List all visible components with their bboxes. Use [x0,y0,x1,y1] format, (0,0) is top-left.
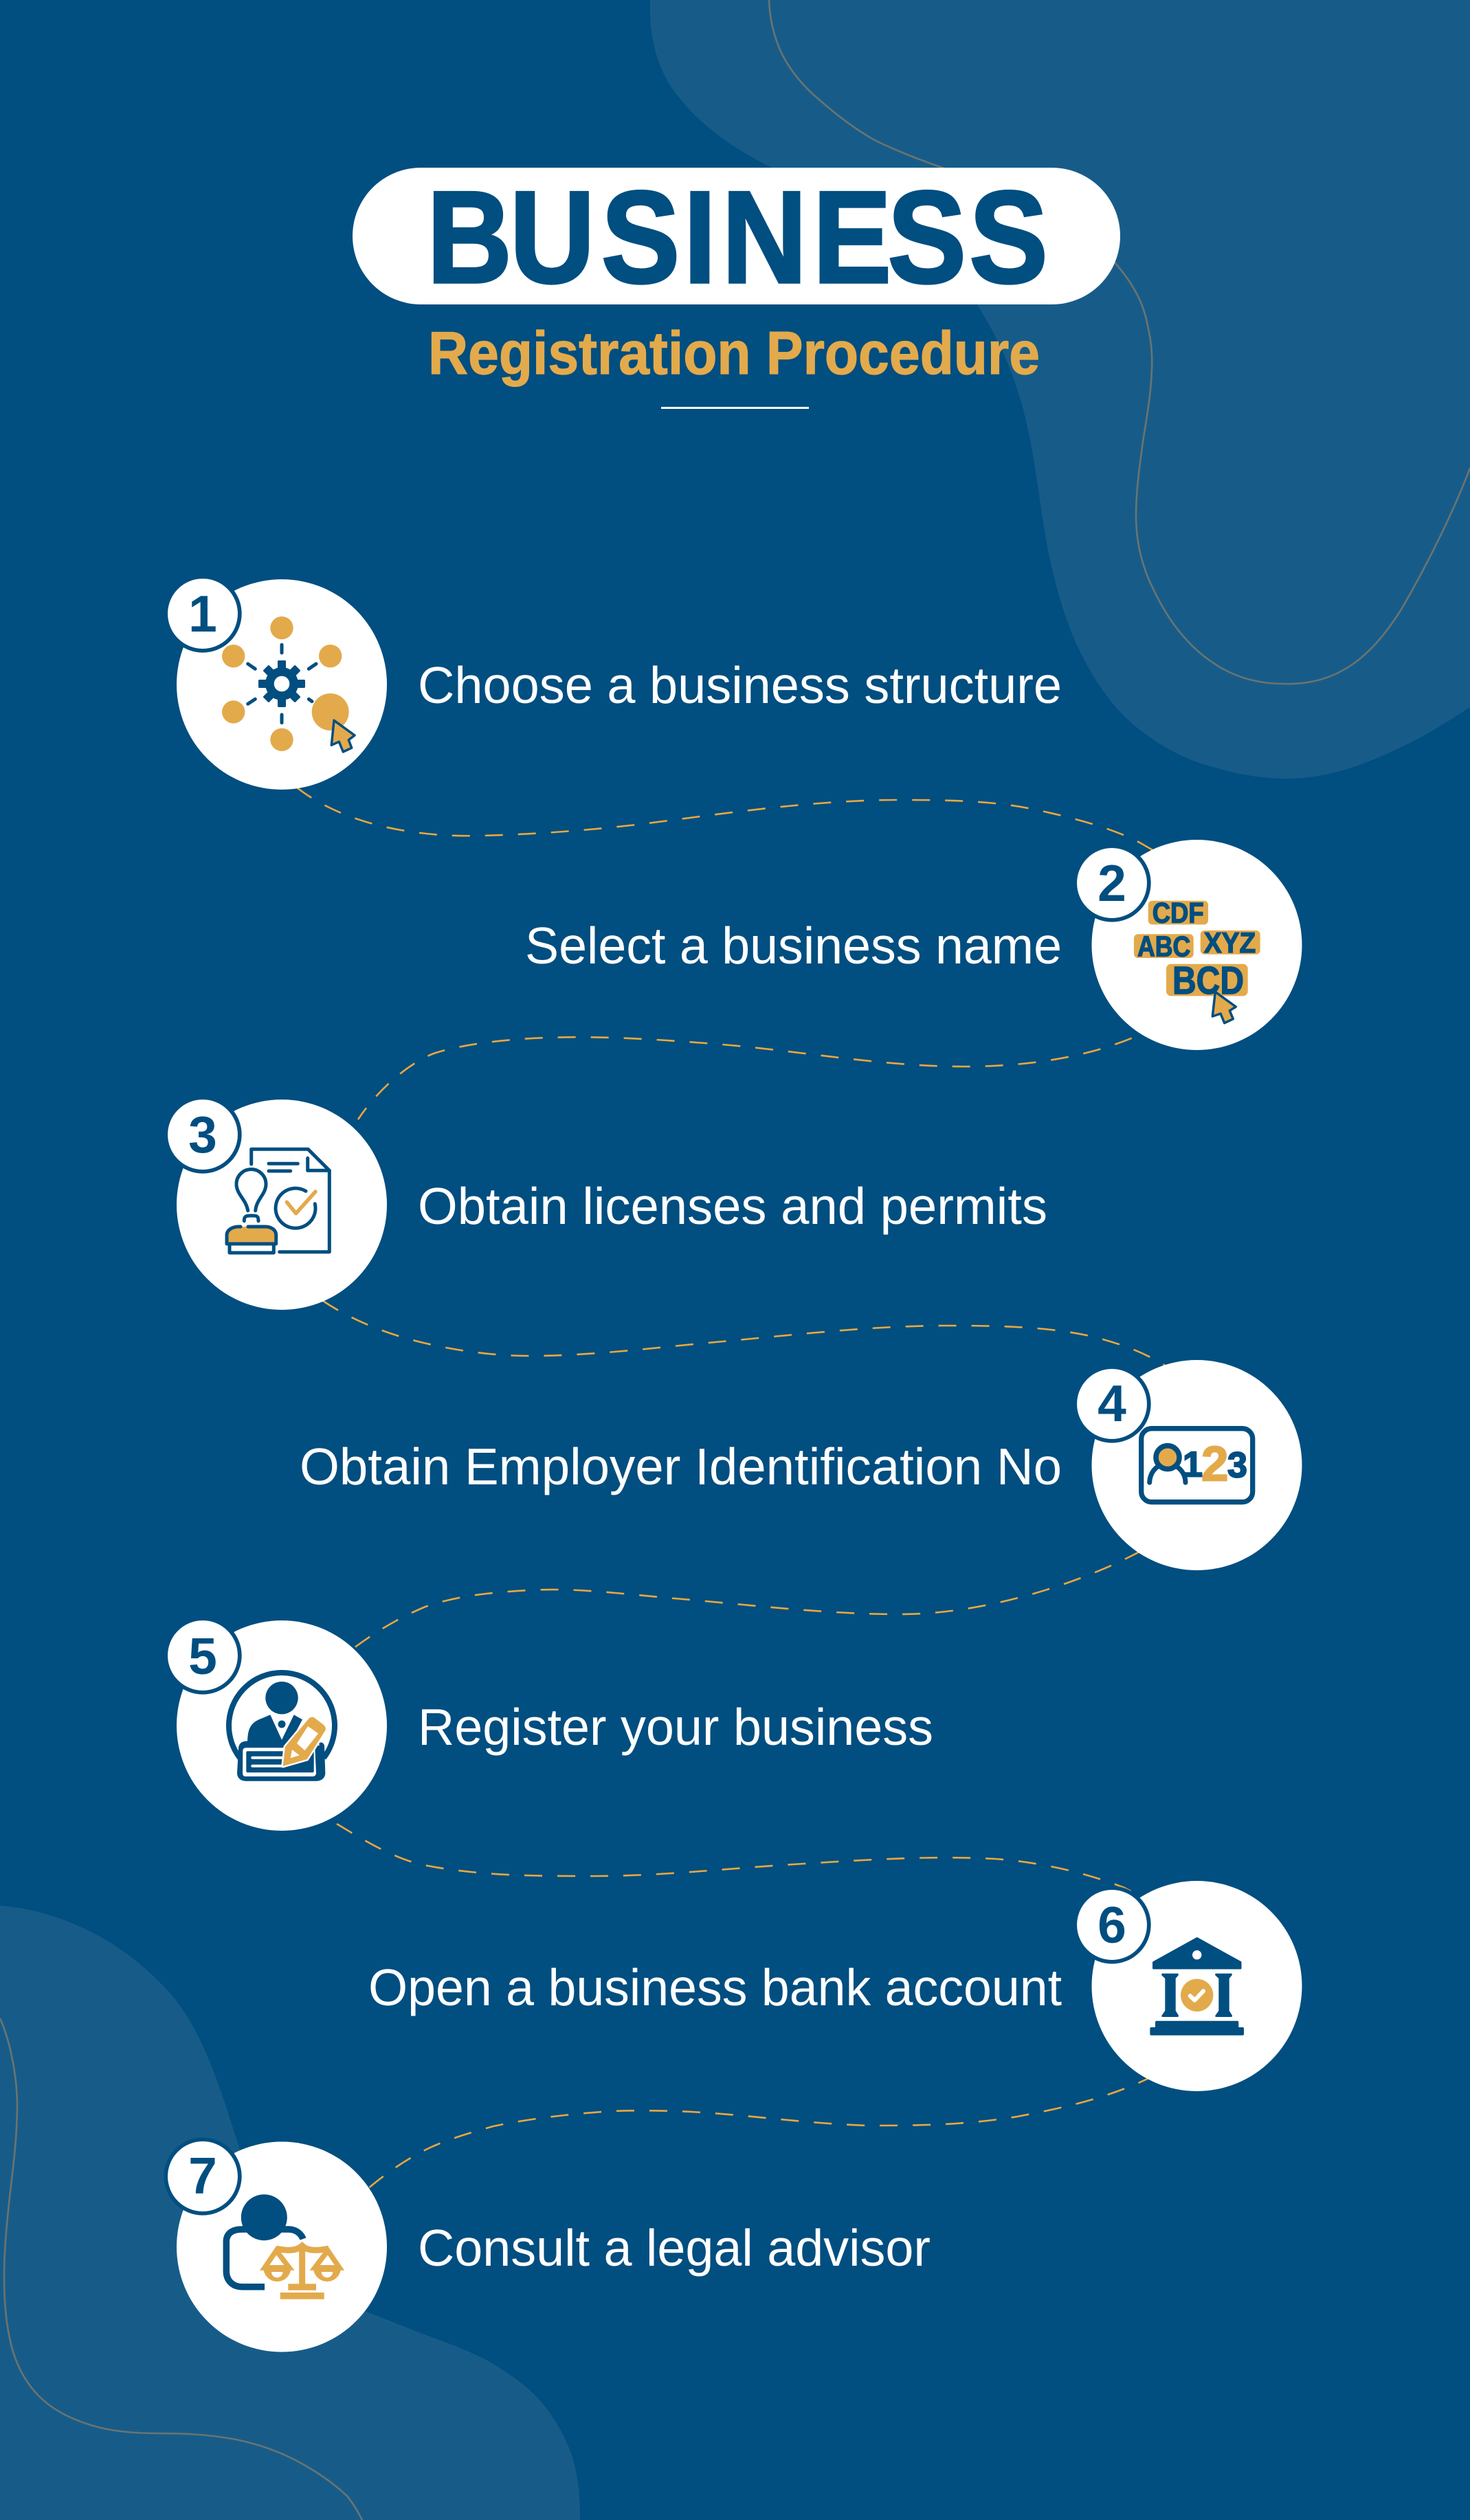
dashed connector 4 to 5 [354,1551,1141,1648]
icon: ID card with 123: 2 [1201,1437,1229,1491]
icon: person signing [229,1673,335,1781]
step 5 circle [177,1620,387,1831]
step 3 label: Obtain licenses and permits [418,1177,1047,1235]
icon: ID card with 123: 3 [1227,1445,1247,1485]
number badge 3 [166,1097,240,1172]
icon: network gear with cursor [222,616,355,752]
dashed connector 1 to 2 [297,788,1168,859]
background contour line: top right [769,0,1470,684]
step 3 circle [177,1100,387,1310]
step 1 label: Choose a business structure [418,656,1062,714]
step 7 [166,2139,931,2352]
number badge 7 [166,2139,240,2214]
icon: ID card with 123: 1 [1183,1445,1203,1484]
number badge 5 [166,1618,240,1693]
step 6 [368,1881,1302,2091]
step 7 label: Consult a legal advisor [418,2219,931,2277]
number badge 2 [1075,846,1149,920]
number badge 4 [1075,1367,1149,1441]
number badge 1: 1 [188,585,217,643]
title underline [661,407,809,409]
number badge 6: 6 [1098,1896,1126,1954]
step 6 circle [1091,1881,1302,2091]
step 5 [166,1618,933,1831]
number badge 5: 5 [188,1627,217,1685]
title pill [353,168,1120,304]
step 4 circle [1091,1360,1302,1570]
background blob: bottom left [0,1906,580,2520]
background blob: top right [650,0,1470,779]
icon: ID card with 123 [1142,1429,1253,1502]
number badge 7: 7 [188,2147,217,2205]
step 3 [166,1097,1047,1310]
icon: bank with check [1150,1938,1244,2036]
number badge 1 [166,577,240,651]
icon: advisor with scales [226,2194,341,2299]
number badge 6 [1075,1888,1149,1962]
icon: stamp and document [227,1149,329,1253]
dashed connector 3 to 4 [323,1301,1185,1378]
number badge 4: 4 [1098,1374,1126,1432]
title: BUSINESS: BUSINESS [427,164,1048,311]
step 7 circle [177,2141,387,2352]
step 5 label: Register your business [418,1698,933,1756]
icon: name tags with cursor: XYZ [1204,926,1256,959]
icon: name tags with cursor: CDF [1152,897,1204,929]
step 2 circle [1091,840,1302,1050]
dashed connector 2 to 3 [358,1024,1161,1119]
title block [353,164,1120,409]
subtitle: Registration Procedure [428,319,1040,387]
background contour line: bottom left [0,2018,362,2520]
dashed connector 5 to 6 [337,1824,1161,1907]
dashed connector 6 to 7 [368,2075,1155,2189]
step 4 [300,1360,1302,1570]
step 2 label: Select a business name [525,917,1062,974]
step 6 label: Open a business bank account [368,1959,1062,2016]
number badge 3: 3 [188,1106,217,1163]
step 1 [166,577,1062,790]
step 4 label: Obtain Employer Identification No [300,1438,1062,1495]
step 2 [525,840,1302,1050]
step 1 circle [177,579,387,790]
number badge 2: 2 [1098,854,1126,912]
icon: name tags with cursor: ABC [1137,930,1190,963]
icon: name tags with cursor: BCD [1172,959,1244,1003]
icon: name tags with cursor [1134,897,1260,1023]
